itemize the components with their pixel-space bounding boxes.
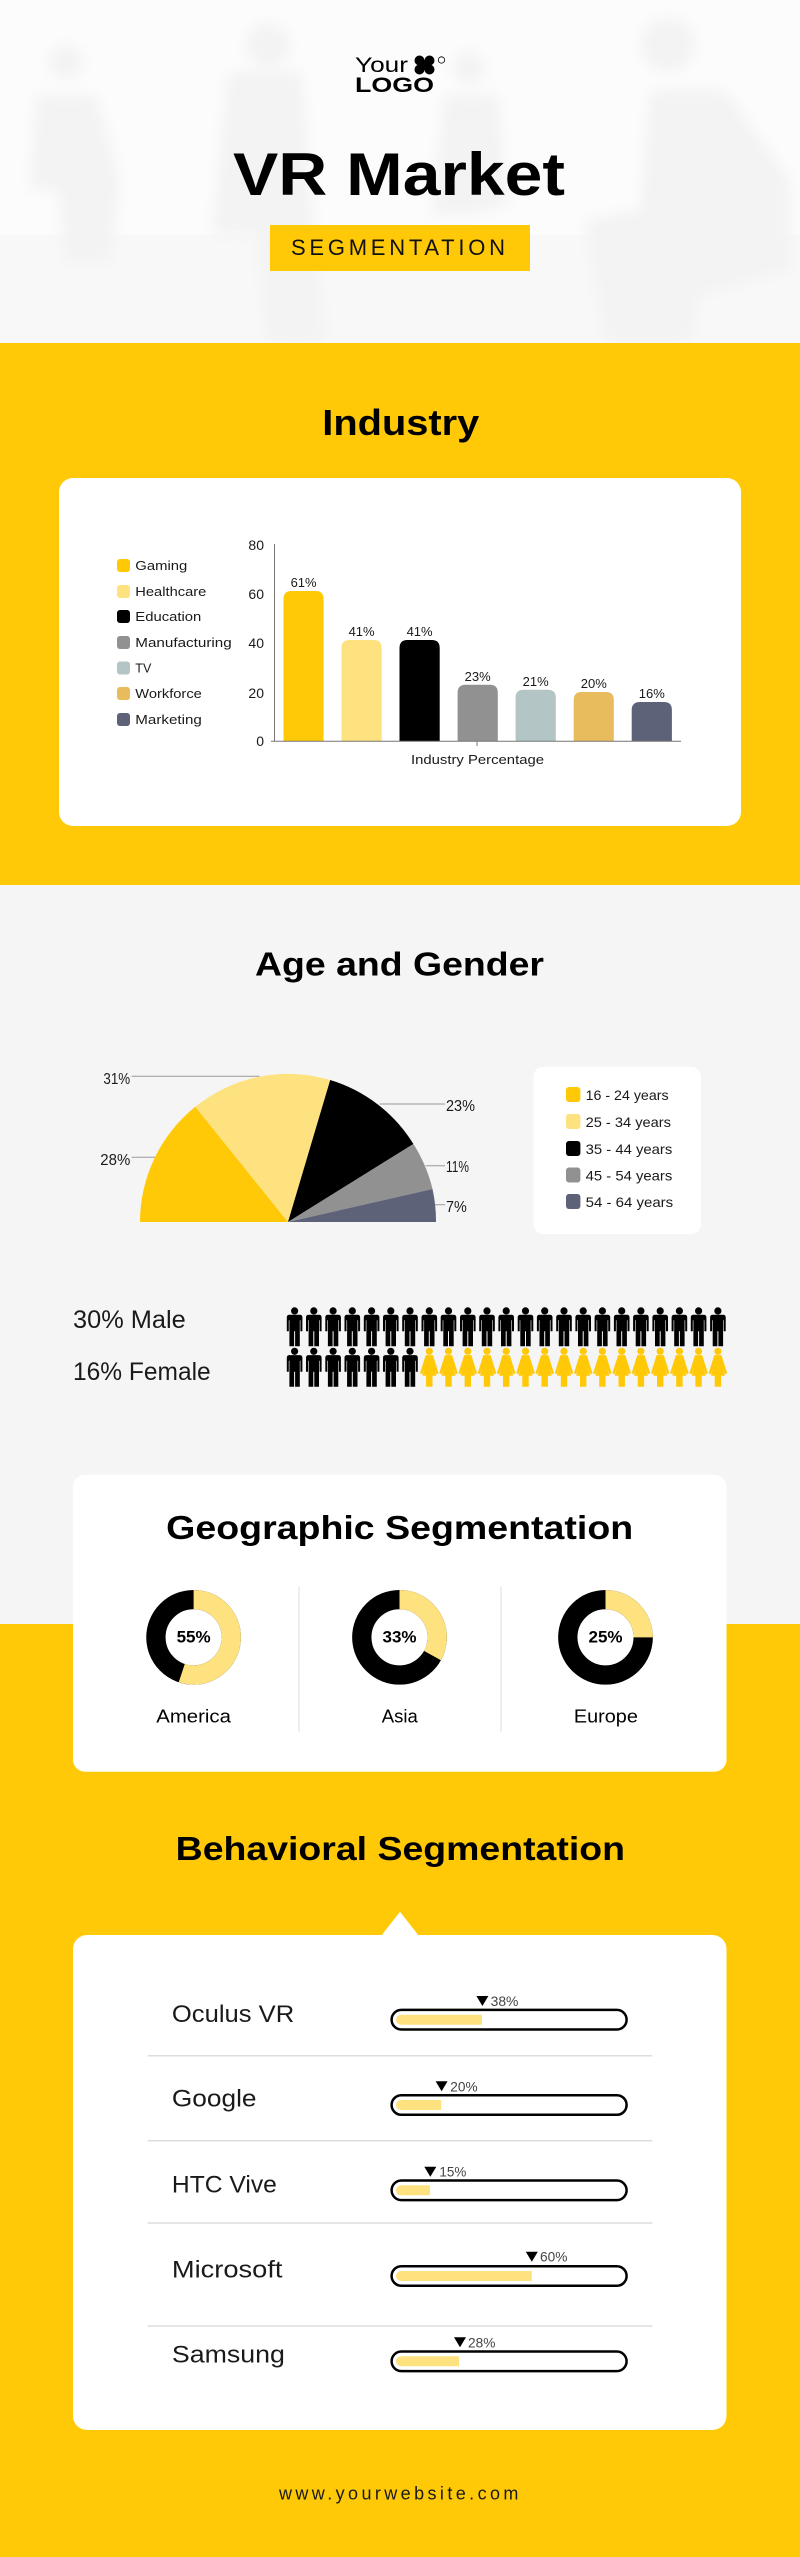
donut: Europe (568, 1600, 643, 1727)
bar chart: industry percentage: 21% (523, 674, 549, 689)
bar chart: industry percentage: 60 (248, 586, 264, 602)
pie chart: age: 31% (103, 1071, 130, 1088)
label: female share: 16% Female (73, 1358, 211, 1386)
pie chart: age (100, 1071, 475, 1222)
legend: industries: TV (135, 660, 152, 676)
card: behavioral segmentation (73, 1912, 726, 2430)
panel: industry (0, 343, 800, 885)
donut: Asia: 33% (382, 1628, 417, 1647)
legend: age groups: 16 - 24 years (586, 1087, 669, 1103)
panel: lower yellow background (0, 1624, 800, 2557)
bar chart: industry percentage: 23% (465, 669, 491, 684)
heading: behavioral segmentation: Behavioral Segmentation (176, 1830, 625, 1867)
row: HTC Vive (172, 2164, 627, 2200)
footer: website: www.yourwebsite.com (278, 2483, 518, 2503)
heading: industry: Industry (322, 402, 479, 443)
logo: LOGO (355, 74, 434, 97)
row: Oculus VR: Oculus VR (172, 2001, 294, 2028)
bar chart: industry percentage: 20% (581, 676, 607, 691)
donut: America: America (156, 1707, 232, 1727)
label: male share: 30% Male (73, 1306, 186, 1334)
logo: Your (355, 54, 408, 77)
row: Samsung: 28% (468, 2334, 495, 2350)
legend: industries: Healthcare (135, 584, 206, 599)
bar chart: industry percentage: Industry Percentage (411, 752, 544, 767)
legend: age groups (534, 1067, 701, 1234)
card: geographic segmentation (73, 1475, 726, 1772)
logo (355, 54, 445, 97)
row: Microsoft: Microsoft (172, 2257, 283, 2284)
legend: age groups: 35 - 44 years (586, 1141, 672, 1157)
row: Oculus VR (172, 1993, 627, 2030)
pictogram: female row (287, 1348, 727, 1387)
row: Google (172, 2078, 627, 2115)
bar chart: industry percentage: 80 (248, 537, 264, 553)
row: HTC Vive: 15% (439, 2164, 466, 2180)
pie chart: age: 7% (446, 1199, 467, 1216)
pie chart: age: 28% (100, 1152, 130, 1169)
legend: industries: Manufacturing (135, 635, 232, 650)
bar chart: industry percentage: 41% (407, 624, 433, 639)
bar chart: industry percentage: 16% (639, 686, 665, 701)
legend: age groups: 45 - 54 years (586, 1168, 672, 1184)
row: Google: 20% (450, 2078, 478, 2094)
donut: Asia: Asia (382, 1707, 419, 1727)
legend: industries: Gaming (135, 558, 187, 573)
subtitle badge (270, 225, 530, 271)
donut: Asia (362, 1600, 437, 1727)
donut: Europe: 25% (588, 1628, 623, 1647)
row: HTC Vive: HTC Vive (172, 2172, 277, 2199)
row: Microsoft: 60% (540, 2249, 567, 2265)
pie chart: age: 23% (446, 1098, 475, 1115)
legend: industries (117, 558, 232, 727)
pictogram: male row (287, 1307, 726, 1346)
title: VR Market (233, 141, 565, 208)
pie chart: age: 11% (446, 1159, 469, 1176)
row: Oculus VR: 38% (491, 1993, 518, 2009)
legend: age groups: 54 - 64 years (586, 1194, 673, 1210)
row: Google: Google (172, 2086, 256, 2113)
row: Samsung (172, 2334, 627, 2371)
legend: industries: Education (135, 609, 201, 624)
donut: America (156, 1600, 232, 1727)
donut: Europe: Europe (574, 1707, 638, 1727)
bar chart: industry percentage: 41% (349, 624, 375, 639)
panel: age and gender (0, 885, 800, 1624)
card: industry chart (59, 478, 741, 826)
background photo silhouettes (30, 18, 790, 343)
legend: age groups: 25 - 34 years (586, 1114, 671, 1130)
legend: industries: Marketing (135, 712, 202, 727)
donut: America: 55% (177, 1628, 211, 1647)
bar chart: industry percentage: 0 (256, 733, 264, 749)
bar chart: industry percentage: 20 (248, 685, 264, 701)
bar chart: industry percentage: 40 (248, 635, 264, 651)
row: Samsung: Samsung (172, 2342, 285, 2369)
row: Microsoft (172, 2249, 627, 2286)
heading: age and gender: Age and Gender (255, 946, 544, 983)
bar chart: industry percentage (248, 537, 681, 767)
subtitle badge: SEGMENTATION (291, 235, 505, 260)
header panel (0, 0, 800, 343)
bar chart: industry percentage: 61% (291, 575, 317, 590)
heading: geographic segmentation: Geographic Segmentation (166, 1509, 633, 1546)
legend: industries: Workforce (135, 686, 202, 701)
